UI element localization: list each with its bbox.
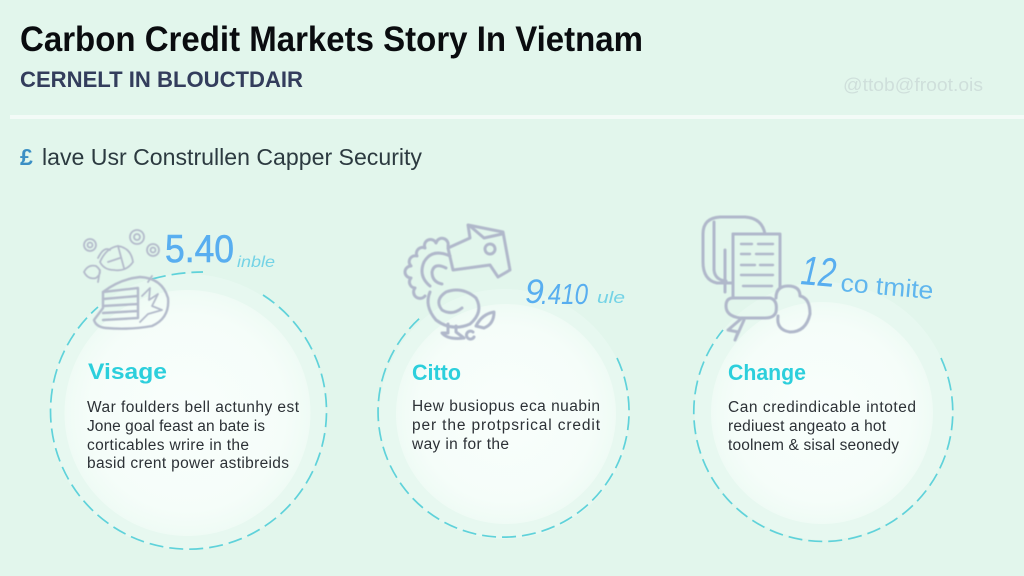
stat: 9.410 ule: ule xyxy=(597,288,625,307)
panel text: change: rediuest angeato a hot xyxy=(728,418,887,435)
stat: 5.40 inble: inble xyxy=(237,254,275,271)
panel text: visage: corticables wrire in the xyxy=(87,437,249,454)
panel heading: visage: Visage xyxy=(88,359,167,384)
stat: 12 co tmite: co tmite xyxy=(839,269,935,305)
dashed ring: citto xyxy=(378,318,629,537)
stat: 12 co tmite: 12 xyxy=(799,247,838,296)
panel heading: citto: Citto xyxy=(412,360,461,385)
title: Carbon Credit Markets Story In Vietnam xyxy=(20,20,643,59)
panel text: visage xyxy=(87,399,300,472)
stat: 9.410 ule: 9 xyxy=(525,273,544,311)
icon: cake and leaves xyxy=(84,230,168,329)
panel: visage xyxy=(50,228,327,550)
icon: gear and arrow xyxy=(405,225,510,339)
subtitle: CERNELT IN BLOUCTDAIR xyxy=(20,67,303,92)
panel text: change: toolnem & sisal seonedy xyxy=(728,437,899,454)
panel: change xyxy=(694,217,953,541)
icon: documents and cloud xyxy=(703,217,810,340)
section heading: £ xyxy=(20,144,33,170)
stat: 9.410 ule xyxy=(525,273,625,311)
panel text: citto: way in for the xyxy=(411,436,509,453)
panel text: citto: Hew busiopus eca nuabin xyxy=(412,398,600,415)
panel text: visage: basid crent power astibreids xyxy=(87,455,289,472)
panel: citto xyxy=(378,225,630,539)
panel text: change xyxy=(728,399,916,454)
stat: 9.410 ule: .410 xyxy=(541,279,588,311)
panel text: citto: per the protpsrical credit xyxy=(412,417,601,434)
panel heading: change: Change xyxy=(728,360,806,385)
section heading: lave Usr Construllen Capper Security xyxy=(42,144,422,170)
dashed ring: visage xyxy=(51,272,327,549)
panel text: citto xyxy=(411,398,601,453)
dashed ring: change xyxy=(694,330,953,541)
panel text: visage: Jone goal feast an bate is xyxy=(87,418,265,435)
stat: 5.40 inble xyxy=(165,228,275,271)
panel text: visage: War foulders bell actunhy est xyxy=(87,399,300,416)
stat: 5.40 inble: 5.40 xyxy=(165,228,234,271)
stat: 12 co tmite xyxy=(799,247,935,305)
watermark handle: @ttob@froot.ois xyxy=(843,75,983,95)
panel text: change: Can credindicable intoted xyxy=(728,399,916,416)
